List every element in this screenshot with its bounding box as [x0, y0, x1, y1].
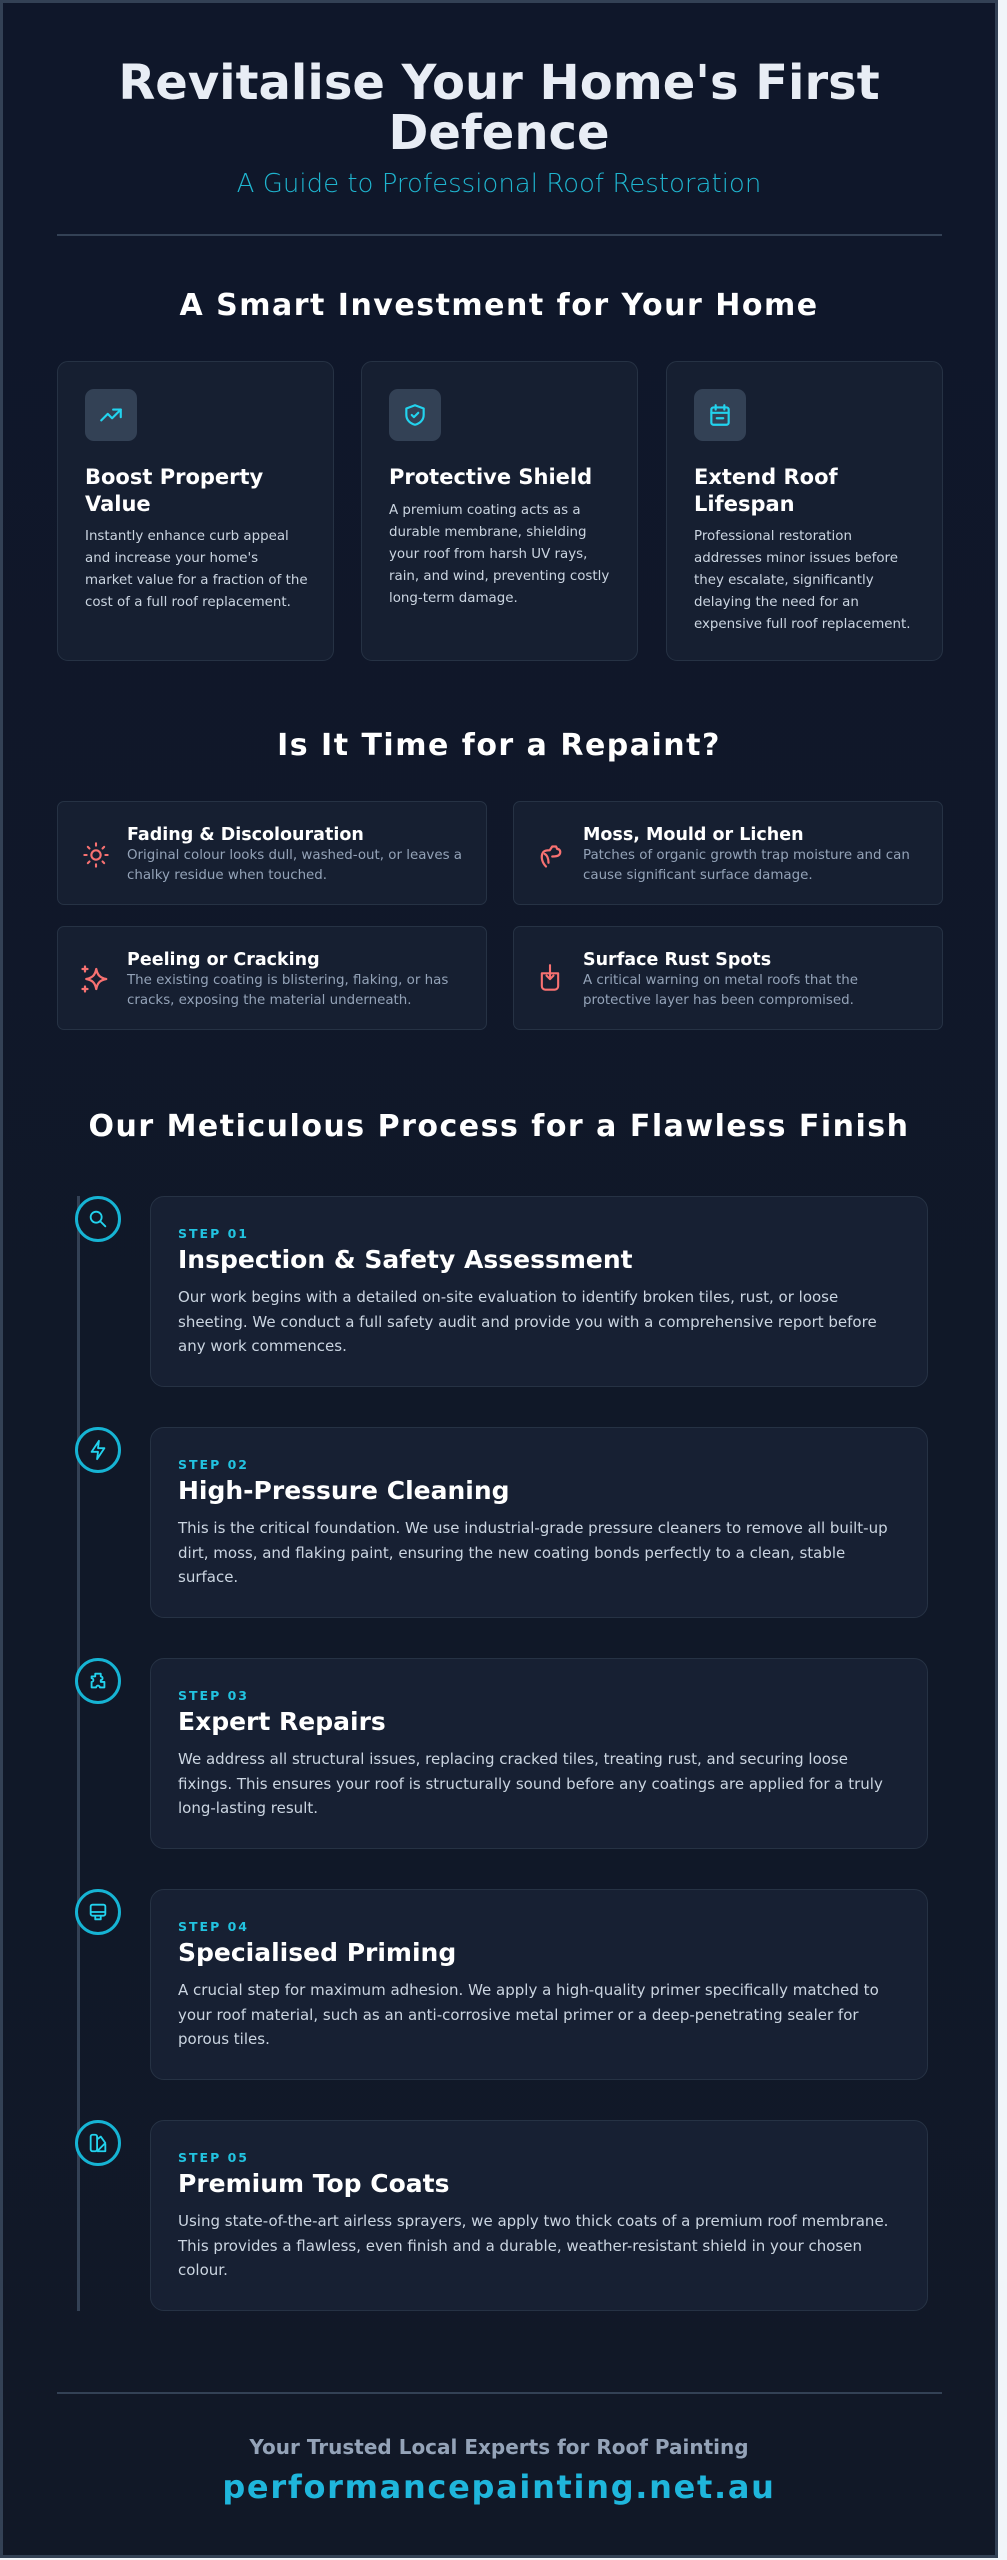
- step 3 card: [150, 1658, 928, 1849]
- step 1 icon: [75, 1196, 121, 1242]
- sign: rust: [513, 926, 943, 1030]
- timeline line: [77, 1196, 80, 2311]
- step 5 icon: [75, 2120, 121, 2166]
- sign text: Patches of organic growth trap moisture and can cause significant surface damage.: [583, 848, 910, 883]
- card text: Instantly enhance curb appeal: [85, 529, 289, 544]
- step 2 card: High-Pressure Cleaning: [178, 1476, 510, 1505]
- card text: and increase your home's: [85, 551, 258, 566]
- step 3 card: STEP 03: [178, 1688, 249, 1703]
- sign: fading: [57, 801, 487, 905]
- step 5 card: Premium Top Coats: [178, 2169, 450, 2198]
- footer url: performancepainting.net.au: [222, 2468, 776, 2506]
- heading: process: Our Meticulous Process for a Flawless Finish: [88, 1109, 910, 1144]
- sign text: Original colour looks dull, washed-out, or leaves a chalky residue when touched.: [127, 848, 462, 883]
- card: boost property value: [57, 361, 334, 661]
- step 3 card: We address all structural issues, replacing cracked tiles, treating rust, and securing loose fixings. This ensures your roof is structurally sound before any coatings are applied for a truly long-lasting result.: [178, 1750, 883, 1817]
- step 4 icon: [75, 1889, 121, 1935]
- step 1 card: Inspection & Safety Assessment: [178, 1245, 633, 1274]
- step 4 card: STEP 04: [178, 1919, 249, 1934]
- step 3 card: Expert Repairs: [178, 1707, 386, 1736]
- card: extend lifespan: [666, 361, 943, 661]
- sign: moss: [513, 801, 943, 905]
- footer tagline: Your Trusted Local Experts for Roof Painting: [249, 2435, 749, 2459]
- sign: peeling: [57, 926, 487, 1030]
- heading: smart investment: A Smart Investment for Your Home: [179, 288, 819, 323]
- step 2 card: [150, 1427, 928, 1618]
- step 5 card: [150, 2120, 928, 2311]
- card text: A premium coating acts as a durable membrane, shielding your roof from harsh UV rays, rain, and wind, preventing costly long-term damage.: [389, 503, 609, 606]
- step 2 icon: [75, 1427, 121, 1473]
- card text: market value for a fraction of the: [85, 573, 308, 588]
- card title: Protective Shield: [389, 465, 592, 489]
- sign title: Surface Rust Spots: [583, 950, 771, 970]
- icon: trending up: [85, 389, 137, 441]
- icon: calendar: [694, 389, 746, 441]
- icon: sparkles: [81, 965, 108, 993]
- step 3 icon: [75, 1658, 121, 1704]
- title: Defence: [388, 105, 610, 161]
- step 1 card: [150, 1196, 928, 1387]
- sign title: Moss, Mould or Lichen: [583, 825, 804, 845]
- step 5 card: Using state-of-the-art airless sprayers, we apply two thick coats of a premium roof membrane. This provides a flawless, even finish and a durable, weather-resistant shield in your chosen colour.: [178, 2212, 888, 2279]
- step 5 card: STEP 05: [178, 2150, 249, 2165]
- step 1 card: Our work begins with a detailed on-site evaluation to identify broken tiles, rust, or loose sheeting. We conduct a full safety audit and provide you with a comprehensive report before any work commences.: [178, 1288, 877, 1355]
- icon: shield: [389, 389, 441, 441]
- step 2 card: This is the critical foundation. We use industrial-grade pressure cleaners to remove all built-up dirt, moss, and flaking paint, ensuring the new coating bonds perfectly to a clean, stable surface.: [178, 1519, 888, 1586]
- icon: sun: [83, 842, 109, 868]
- card: protective shield: [361, 361, 638, 661]
- step 2 card: STEP 02: [178, 1457, 249, 1472]
- title: Revitalise Your Home's First: [118, 55, 880, 111]
- heading: repaint: Is It Time for a Repaint?: [277, 728, 721, 763]
- subtitle: A Guide to Professional Roof Restoration: [237, 169, 761, 199]
- sign text: A critical warning on metal roofs that the protective layer has been compromised.: [583, 973, 858, 1008]
- icon: moss: [540, 845, 562, 868]
- sign text: The existing coating is blistering, flaking, or has cracks, exposing the material underneath.: [127, 973, 448, 1008]
- step 4 card: [150, 1889, 928, 2080]
- card title: Boost Property Value: [85, 465, 263, 516]
- card text: cost of a full roof replacement.: [85, 595, 291, 610]
- step 1 card: STEP 01: [178, 1226, 249, 1241]
- sign title: Peeling or Cracking: [127, 950, 320, 970]
- sign title: Fading & Discolouration: [127, 825, 364, 845]
- title: [118, 55, 880, 161]
- card text: Professional restoration addresses minor issues before they escalate, significantly delaying the need for an expensive full roof replacement.: [694, 529, 910, 632]
- icon: bucket: [540, 964, 560, 991]
- step 4 card: Specialised Priming: [178, 1938, 456, 1967]
- step 4 card: A crucial step for maximum adhesion. We apply a high-quality primer specifically matched to your roof material, such as an anti-corrosive metal primer or a deep-penetrating sealer for porous tiles.: [178, 1981, 879, 2048]
- card title: Extend Roof Lifespan: [694, 465, 838, 516]
- card text: [85, 529, 308, 610]
